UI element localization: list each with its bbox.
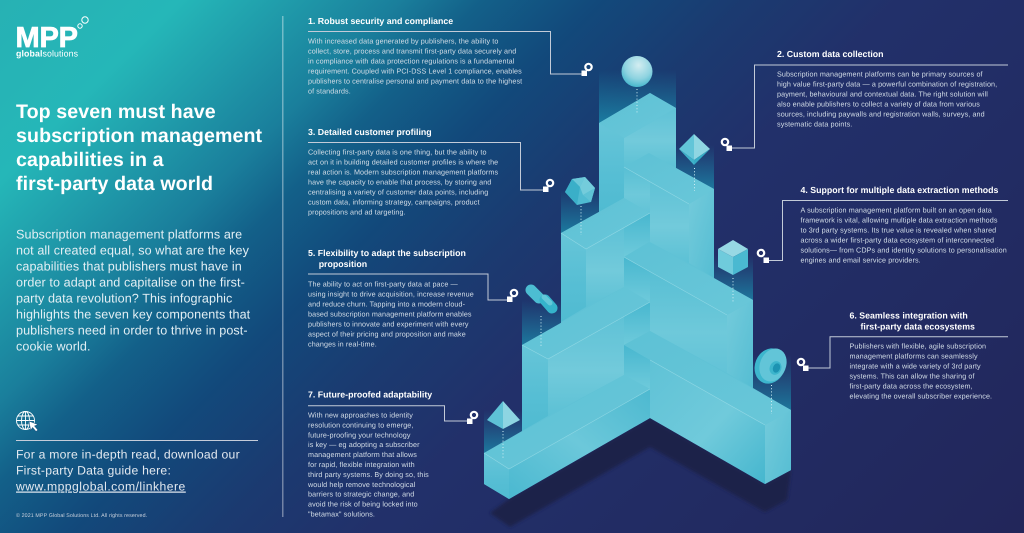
body 4: across a wider first-party data ecosystem of interconnected bbox=[800, 236, 994, 244]
body 7: future-proofing your technology bbox=[308, 430, 411, 439]
download call to action: www.mppglobal.com/linkhere bbox=[15, 480, 186, 494]
body 2: sources, including paywalls and registration walls, surveys, and bbox=[777, 110, 985, 118]
heading 2: 2. Custom data collection bbox=[777, 49, 884, 59]
copyright: © 2021 MPP Global Solutions Ltd. All rights reserved. bbox=[16, 513, 147, 519]
body 1: in compliance with data protection regulations is a fundamental bbox=[308, 56, 515, 66]
connector 6 bbox=[805, 337, 1008, 368]
connector 2 bbox=[729, 65, 1008, 148]
logo: MPP global solutions: MPP bbox=[16, 22, 78, 54]
body 7: third party systems. By doing so, this bbox=[308, 470, 429, 479]
intro paragraph: publishers need in order to thrive in post- bbox=[16, 324, 248, 338]
body 6: management platforms can seamlessly bbox=[850, 352, 978, 360]
heading 1: 1. Robust security and compliance bbox=[308, 16, 453, 26]
heading 4: 4. Support for multiple data extraction methods bbox=[800, 185, 999, 195]
panel: 7 adaptability bbox=[307, 390, 477, 518]
body 6: first-party data across the ecosystem, bbox=[850, 382, 973, 390]
intro paragraph: cookie world. bbox=[16, 340, 91, 354]
body 7: barriers to strategic change, and bbox=[308, 490, 414, 499]
icon 7: pyramid bbox=[487, 401, 520, 458]
icon 4: cube bbox=[718, 240, 748, 303]
body 5: aspect of their pricing and proposition and make bbox=[308, 330, 466, 338]
body 7: avoid the risk of being locked into bbox=[308, 500, 418, 509]
body 6: systems. This can allow the sharing of bbox=[850, 372, 975, 380]
icon 1: sphere bbox=[622, 56, 652, 114]
body 4: engines and email service providers. bbox=[800, 256, 921, 264]
vertical divider bbox=[282, 16, 284, 517]
body 3: Collecting first-party data is one thing, but the ability to bbox=[308, 148, 487, 156]
body 3: have the capacity to enable that process, by storing and bbox=[308, 178, 491, 186]
icon: globe with cursor bbox=[16, 412, 38, 432]
intro paragraph: order to adapt and capitalise on the first- bbox=[16, 276, 245, 290]
pin 2 bbox=[722, 139, 732, 151]
body 3: act on it in building detailed customer profiles is where the bbox=[308, 158, 498, 166]
connector 7 bbox=[308, 406, 468, 421]
body 6: integrate with a wide variety of 3rd party bbox=[850, 362, 981, 370]
intro paragraph: Subscription management platforms are bbox=[16, 228, 242, 242]
pin 4 bbox=[758, 250, 769, 263]
panel: intro column bbox=[15, 17, 268, 519]
pin 3 bbox=[543, 180, 553, 192]
icon 6: ring bbox=[749, 344, 791, 414]
body 5: and reduce churn. Tapping into a modern cloud- bbox=[308, 300, 466, 308]
body 6: elevating the overall subscriber experience. bbox=[850, 392, 992, 400]
connector 5 bbox=[308, 274, 509, 300]
body 2: also enable publishers to collect a variety of data from various bbox=[777, 100, 980, 108]
body 1: of standards. bbox=[308, 86, 351, 96]
panel: 3 profiling bbox=[308, 127, 553, 216]
shadow bbox=[490, 418, 791, 527]
top tier bbox=[599, 93, 676, 212]
intro paragraph: not all created equal, so what are the key bbox=[16, 244, 250, 258]
panel: 6 integration bbox=[798, 310, 1008, 400]
title: subscription management bbox=[16, 125, 263, 147]
heading 7: 7. Future-proofed adaptability bbox=[308, 390, 432, 400]
body 7: is key — eg adopting a subscriber bbox=[308, 440, 420, 449]
connector 3 bbox=[308, 142, 546, 190]
second tier right bbox=[624, 153, 714, 278]
title: first-party data world bbox=[16, 173, 213, 195]
pin 1 bbox=[582, 64, 592, 76]
logo: MPP global solutions bbox=[16, 17, 88, 58]
body 3: centralising a variety of customer data points, including bbox=[308, 188, 488, 196]
body 3: propositions and ad targeting. bbox=[308, 208, 406, 216]
body 4: A subscription management platform built on an open data bbox=[800, 206, 992, 214]
third tier right bbox=[624, 242, 753, 388]
panel: 1 security bbox=[308, 16, 592, 96]
body 6: Publishers with flexible, agile subscription bbox=[850, 342, 986, 350]
body 1: With increased data generated by publishers, the ability to bbox=[308, 36, 498, 46]
logo: MPP global solutions: globalsolutions bbox=[16, 48, 79, 58]
third tier left bbox=[561, 198, 650, 322]
body 4: to 3rd party systems. Its true value is revealed when shared bbox=[800, 226, 996, 234]
heading 6: 6. Seamless integration with bbox=[850, 310, 968, 320]
icon 5: twisted ribbon bbox=[531, 290, 552, 347]
fifth tier left bbox=[484, 375, 650, 499]
heading 6: first-party data ecosystems bbox=[860, 322, 975, 332]
solid tower silhouette bbox=[484, 93, 791, 499]
divider bbox=[16, 440, 258, 441]
body 1: collect, store, process and transmit first-party data securely and bbox=[308, 46, 516, 56]
body 2: payment, behavioural and contextual data. The right solution will bbox=[777, 90, 988, 98]
body 7: for rapid, flexible integration with bbox=[308, 460, 415, 469]
intro paragraph: capabilities that publishers must have in bbox=[16, 260, 242, 274]
icon 3: polyhedron bbox=[565, 177, 595, 235]
body 7: With new approaches to identity bbox=[308, 410, 413, 420]
heading 5: 5. Flexibility to adapt the subscription bbox=[308, 248, 466, 258]
pin 6 bbox=[798, 359, 808, 371]
connector 1 bbox=[308, 32, 584, 74]
icon 2: diamond bbox=[679, 134, 710, 191]
heading 5: proposition bbox=[319, 259, 367, 269]
body 7: would help remove technological bbox=[307, 480, 416, 489]
body 3: real action is. Modern subscription management platforms bbox=[308, 168, 498, 176]
body 7: "betamax" solutions. bbox=[308, 510, 375, 518]
download call to action: First-party Data guide here: bbox=[16, 464, 171, 478]
panel: 4 extraction bbox=[758, 185, 1009, 264]
glow columns bbox=[484, 70, 791, 453]
fourth tier left bbox=[522, 287, 650, 431]
body 7: management platform that allows bbox=[308, 450, 417, 459]
body 2: systematic data points. bbox=[777, 120, 852, 128]
fifth tier right bbox=[624, 331, 791, 484]
panel: 2 custom data bbox=[722, 49, 1008, 151]
body 1: requirement. Coupled with PCI-DSS Level 1 compliance, enables bbox=[308, 66, 522, 76]
body 5: using insight to drive acquisition, increase revenue bbox=[308, 290, 474, 298]
isometric tower illustration bbox=[484, 70, 791, 527]
panel: 5 flexibility bbox=[308, 248, 517, 348]
title: Top seven must have bbox=[16, 101, 216, 123]
body 4: framework is vital, allowing multiple data extraction methods bbox=[800, 216, 998, 224]
body 7: resolution continuing to emerge, bbox=[308, 420, 414, 429]
intro paragraph: highlights the seven key components that bbox=[16, 308, 251, 322]
body 4: solutions— from CDPs and identity solutions to personalisation bbox=[800, 246, 1007, 254]
body 5: changes in real-time. bbox=[308, 340, 377, 348]
body 5: The ability to act on first-party data at pace — bbox=[308, 280, 459, 288]
body 2: high value first-party data — a powerful combination of registration, bbox=[777, 80, 997, 88]
body 3: custom data, informing strategy, campaigns, product bbox=[308, 198, 480, 206]
body 5: publishers to innovate and experiment with every bbox=[308, 320, 469, 328]
body 2: Subscription management platforms can be primary sources of bbox=[777, 70, 983, 78]
pin 7 bbox=[467, 412, 477, 424]
heading 3: 3. Detailed customer profiling bbox=[308, 127, 432, 137]
title: capabilities in a bbox=[16, 149, 165, 171]
body 1: publishers to centralise personal and payment data to the highest bbox=[308, 76, 522, 86]
body 5: based subscription management platform enables bbox=[308, 310, 472, 318]
download call to action: For a more in-depth read, download our bbox=[16, 448, 240, 462]
intro paragraph: party data revolution? This infographic bbox=[16, 292, 232, 306]
connector 4 bbox=[766, 200, 1008, 260]
pin 5 bbox=[507, 290, 517, 302]
